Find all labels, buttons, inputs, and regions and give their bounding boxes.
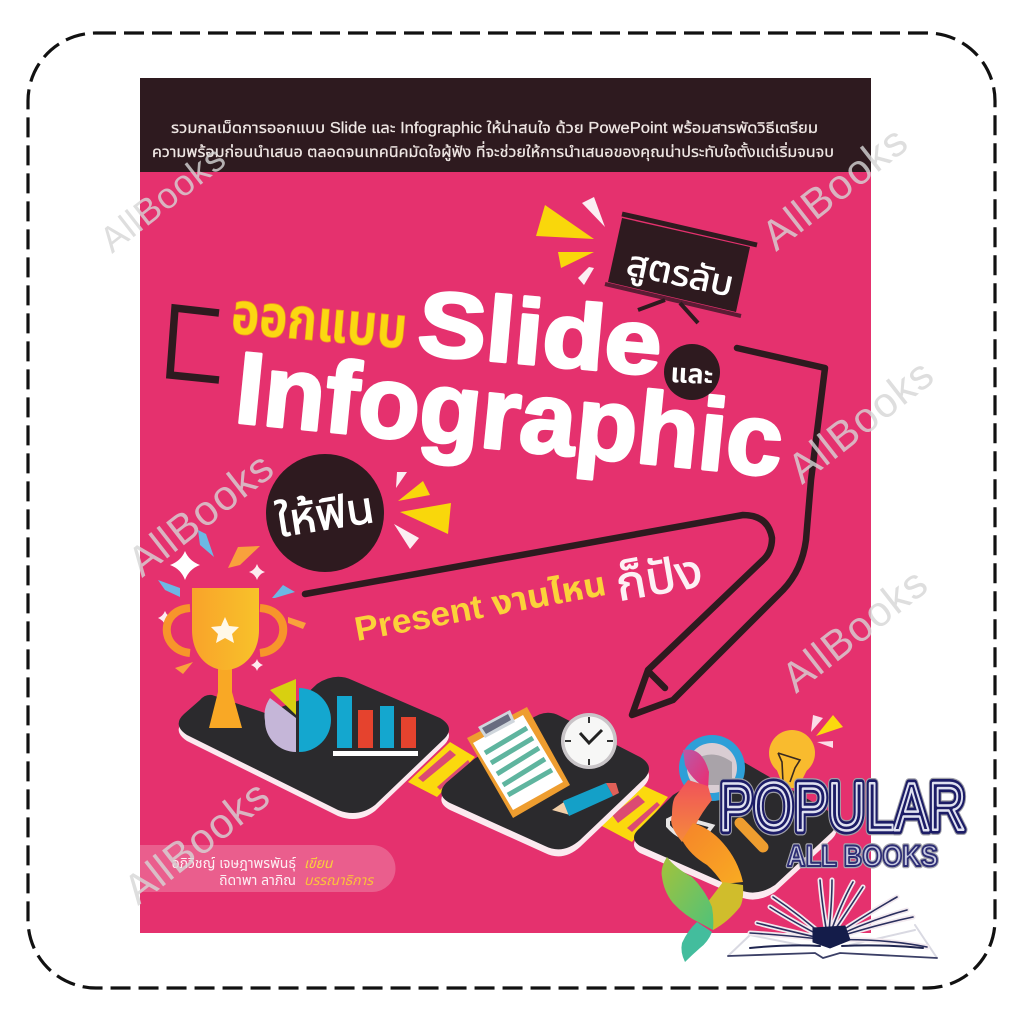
- panel: author credits: อภิวิชญ์ เจษฎาพรพันธุ์: [172, 855, 296, 872]
- panel: phone one: [179, 677, 449, 819]
- icon: burst near board: [536, 197, 605, 285]
- tagline: [352, 544, 706, 649]
- panel: author credits: บรรณาธิการ: [304, 872, 374, 888]
- watermark: AllBooks repeated: AllBooks: [92, 137, 234, 260]
- panel: top description band: [140, 78, 871, 172]
- panel: book cover: [140, 78, 871, 933]
- icon: trophy: [167, 588, 283, 728]
- watermark: AllBooks repeated: AllBooks: [119, 443, 283, 585]
- panel: author credits: เขียน: [304, 855, 334, 871]
- icon: magnifier: [679, 735, 763, 847]
- heading: Infographic: Infographic: [231, 330, 788, 498]
- logo: ALL BOOKS wordmark: ALL BOOKS: [787, 840, 938, 873]
- panel: phone three: [634, 757, 837, 900]
- watermark: AllBooks repeated: AllBooks: [779, 350, 943, 492]
- panel: top description band: รวมกลเม็ดการออกแบบ Slide และ Infographic ให้น่าสนใจ ด้วย PowePoint พร้อมสารพัดวิธีเตรียม: [171, 119, 818, 137]
- bar chart: [333, 696, 418, 756]
- right title bracket and pencil outline: [305, 348, 825, 715]
- watermark: AllBooks repeated: AllBooks: [773, 559, 937, 701]
- icon: clipboard: [467, 707, 570, 818]
- watermark: AllBooks repeated: AllBooks: [753, 117, 917, 259]
- watermark: AllBooks repeated: AllBooks: [115, 771, 279, 913]
- logo: ALL BOOKS wordmark: ALL BOOKS: [787, 840, 938, 873]
- icon: presentation board: [605, 214, 757, 323]
- panel: author credits: ถิดาพา ลาภิณ: [219, 872, 296, 888]
- logo: open book: [728, 880, 937, 958]
- connector one: [408, 742, 475, 797]
- badge: และ: [664, 344, 720, 400]
- badge: ให้ฟิน: [266, 454, 384, 572]
- left title bracket: [170, 308, 219, 380]
- heading: Slide: Slide: [414, 272, 666, 395]
- badge: ให้ฟิน: ให้ฟิน: [273, 483, 377, 547]
- logo: ribbon mark: [662, 749, 743, 962]
- watermark: AllBooks repeated: [92, 117, 943, 913]
- icon: trophy confetti: [158, 530, 306, 674]
- icon: presentation board: สูตรลับ: [623, 244, 737, 305]
- connector two: [600, 785, 668, 842]
- panel: author credits: [140, 845, 395, 892]
- icon: pencil: [552, 783, 619, 816]
- heading: ออกแบบ: ออกแบบ: [229, 280, 410, 361]
- icon: clock: [561, 713, 617, 769]
- panel: phone two: [441, 713, 649, 856]
- icon: burst near badge: [394, 472, 451, 549]
- icon: light bulb: [769, 715, 843, 788]
- tagline: Present งานไหน: [352, 565, 609, 649]
- panel: top description band: ความพร้อมก่อนนำเสนอ ตลอดจนเทคนิคมัดใจผู้ฟัง ที่จะช่วยให้การนำเสนอของคุณน่าประทับใจตั้งแต่เริ่มจนจบ: [152, 141, 834, 161]
- badge: และ: และ: [670, 358, 714, 390]
- pie chart: [265, 679, 331, 752]
- tagline: ก็ปัง: [612, 544, 706, 611]
